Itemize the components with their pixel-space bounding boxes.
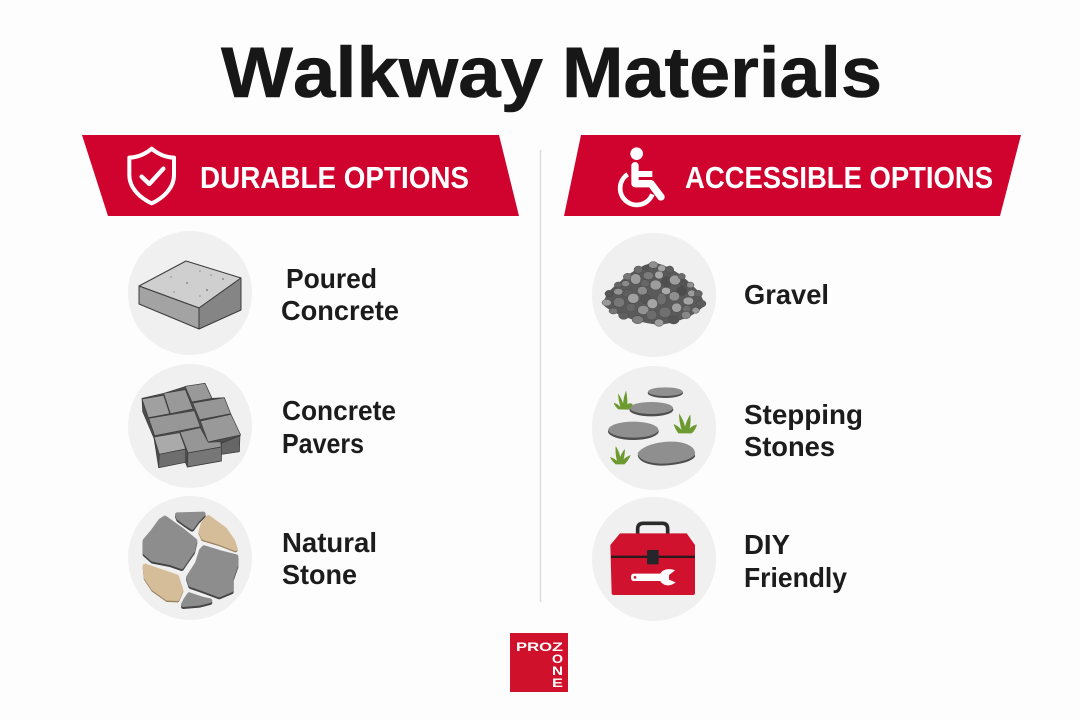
label: Stone <box>282 559 357 590</box>
label: Stones <box>744 431 835 462</box>
logo: prozone <box>510 633 568 692</box>
logo: prozone: N <box>552 666 563 678</box>
icon: pavers <box>142 383 241 468</box>
icon: concrete slab <box>139 261 241 329</box>
logo: prozone: E <box>552 678 563 690</box>
icon: toolbox <box>610 523 695 595</box>
label <box>744 399 863 462</box>
label: DIY <box>744 529 790 560</box>
title: Walkway <box>221 34 544 113</box>
label: Poured <box>286 263 377 294</box>
label: Pavers <box>282 428 364 459</box>
label: Gravel <box>744 279 829 310</box>
panel header: accessible options <box>564 135 1021 216</box>
item: stepping stones <box>592 366 863 490</box>
panel header: durable options <box>82 135 519 216</box>
label: Concrete <box>281 295 399 326</box>
icon: gravel pile <box>602 262 706 326</box>
icon: natural stones <box>145 514 236 607</box>
title <box>221 34 882 113</box>
logo: prozone: O <box>552 654 563 666</box>
item: concrete pavers <box>128 364 396 488</box>
label <box>744 529 848 593</box>
label: Natural <box>282 527 377 558</box>
heading: accessible options: ACCESSIBLE OPTIONS <box>685 160 993 195</box>
heading: durable options: DURABLE OPTIONS <box>200 160 469 195</box>
label <box>282 395 396 459</box>
logo: prozone: Z <box>552 642 563 654</box>
logo: prozone: PRO <box>516 642 552 654</box>
icon: wheelchair <box>620 147 661 205</box>
icon: shield with check <box>129 149 174 203</box>
label <box>282 527 377 590</box>
label <box>281 263 399 326</box>
label: Friendly <box>744 562 848 593</box>
item: natural stone <box>128 496 377 620</box>
item: gravel <box>592 233 829 357</box>
title: Materials <box>562 34 882 113</box>
item: poured concrete <box>128 231 399 355</box>
icon: stepping stones with grass <box>608 387 697 466</box>
label: Stepping <box>744 399 863 430</box>
item: diy friendly <box>592 497 848 621</box>
label: Concrete <box>282 395 396 426</box>
